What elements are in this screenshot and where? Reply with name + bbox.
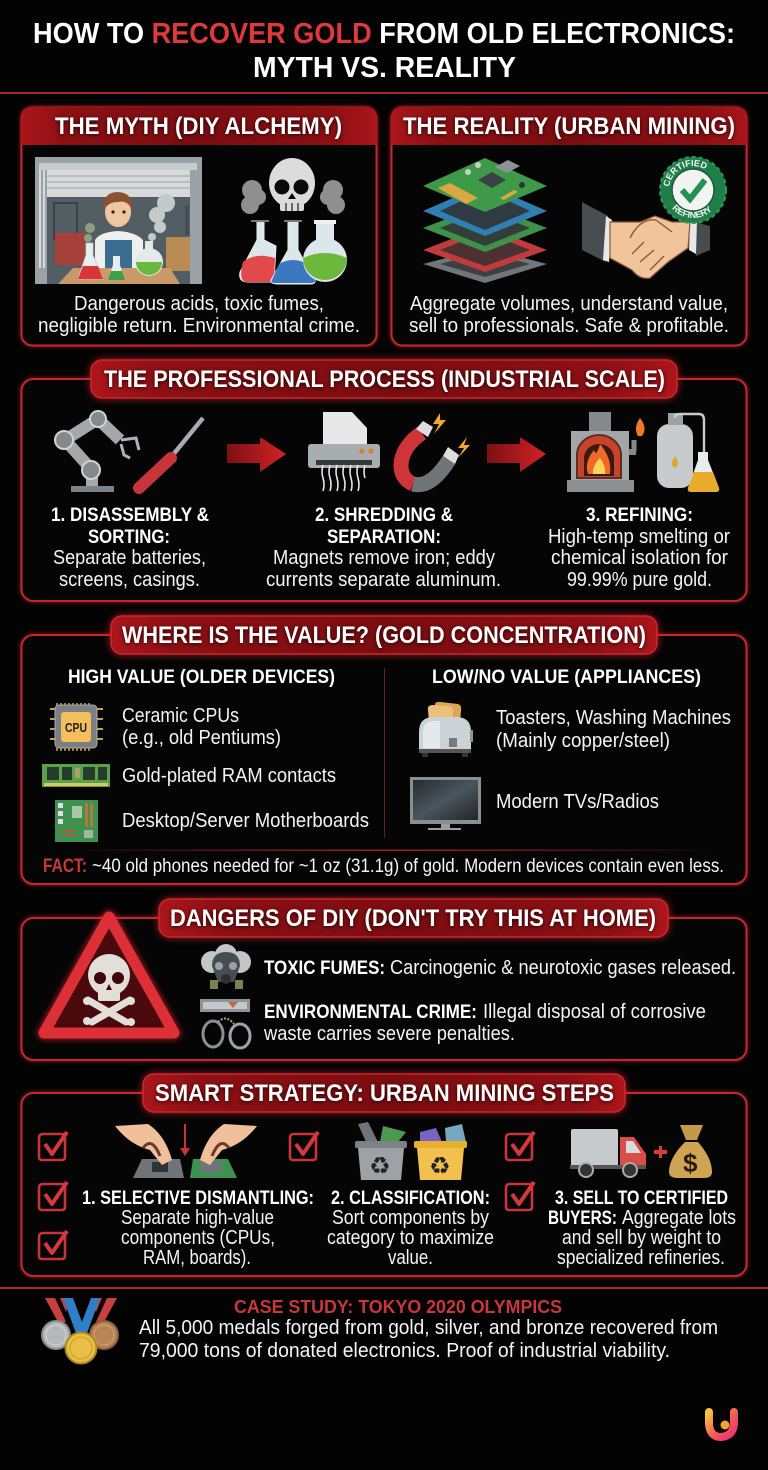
text: myth description: Dangerous acids, toxic fumes, (74, 293, 324, 315)
text: environmental crime (263, 1001, 706, 1045)
icon: truck (570, 1129, 646, 1177)
heading: professional process: THE PROFESSIONAL PROCESS (INDUSTRIAL SCALE) (104, 366, 665, 393)
text: case study body: All 5,000 medals forged from gold, silver, and bronze recovered from (139, 1317, 718, 1339)
heading: smart strategy (143, 1074, 625, 1112)
text: step 1: 1. DISASSEMBLY & (51, 504, 209, 526)
text: sell to certified buyers (548, 1187, 736, 1269)
icon: motherboard (55, 800, 98, 842)
icon: robot arm (55, 411, 139, 492)
heading: dangers of DIY: DANGERS OF DIY (DON'T TRY THIS AT HOME) (170, 905, 656, 932)
text: classification: value. (388, 1247, 433, 1269)
icon: recycling bins: ♻ (429, 1152, 451, 1180)
checklist icons: right column (506, 1132, 534, 1210)
step 2: shredding and separation (266, 412, 501, 591)
icon: leaking pipe and handcuffs (200, 999, 250, 1048)
title: HOW TO RECOVER GOLD FROM OLD ELECTRONICS: (33, 18, 735, 50)
icon: plus sign (654, 1146, 667, 1158)
text: step 3: 3. REFINING: (586, 504, 693, 526)
text: toxic fumes (264, 957, 736, 979)
icon: television (410, 777, 481, 830)
text: toxic fumes: Carcinogenic & neurotoxic gases released. (390, 957, 736, 979)
text: sell to certified buyers: and sell by weight to (562, 1227, 721, 1249)
panel: dangers of DIY (22, 899, 746, 1060)
icon: money bag (669, 1125, 712, 1178)
text: myth description (38, 293, 360, 337)
text: step 3: 99.99% pure gold. (567, 569, 712, 591)
text: classification: category to maximize (327, 1227, 494, 1249)
text: case study heading: CASE STUDY: TOKYO 2020 OLYMPICS (234, 1296, 562, 1317)
column: high value: HIGH VALUE (OLDER DEVICES) (68, 666, 335, 688)
text: step 1: screens, casings. (59, 569, 200, 591)
text: step 1 (51, 504, 209, 591)
text: step 2 (266, 504, 501, 591)
panel: the professional process (22, 360, 746, 601)
text: step 1: SORTING: (88, 526, 170, 548)
step 1: disassembly and sorting (51, 411, 209, 591)
heading: the reality: THE REALITY (URBAN MINING) (403, 113, 735, 140)
panel: where is the value (22, 616, 746, 884)
text: step 1: Separate batteries, (53, 547, 206, 569)
icon: screwdriver (139, 418, 203, 488)
text: RAM contacts: Gold-plated RAM contacts (122, 765, 336, 787)
column: low value: LOW/NO VALUE (APPLIANCES) (432, 666, 701, 688)
icon: handshake (582, 202, 710, 278)
icon: recycling bins: ♻ (369, 1152, 391, 1180)
text: selective dismantling: 1. SELECTIVE DISMANTLING: (82, 1187, 314, 1209)
column: high value (42, 666, 369, 842)
text: classification: Sort components by (332, 1207, 489, 1229)
text: sell to certified buyers: 3. SELL TO CERTIFIED (555, 1187, 728, 1209)
text: classification: 2. CLASSIFICATION: (331, 1187, 490, 1209)
text: toasters: (Mainly copper/steel) (496, 730, 670, 752)
text: selective dismantling: Separate high-value (121, 1207, 274, 1229)
column: low value (410, 666, 731, 830)
text: myth description: negligible return. Environmental crime. (38, 315, 360, 337)
icon: garage chemist (35, 157, 202, 284)
icon: shredder (308, 412, 380, 491)
step: sell to certified buyers (548, 1125, 736, 1269)
heading: dangers of DIY (159, 899, 668, 937)
text: selective dismantling (82, 1187, 314, 1269)
icon: certified refinery badge: REFINERY (672, 204, 710, 218)
text: modern TVs: Modern TVs/Radios (496, 791, 659, 813)
text: step 3 (548, 504, 730, 591)
text: case study body (139, 1317, 718, 1362)
text: sell to certified buyers: specialized refineries. (557, 1247, 725, 1269)
heading: smart strategy: SMART STRATEGY: URBAN MINING STEPS (155, 1080, 614, 1107)
text: reality description: Aggregate volumes, understand value, (410, 293, 728, 315)
icon: gas mask in cloud (201, 944, 251, 989)
text: classification (327, 1187, 494, 1269)
icon: magnet (401, 413, 470, 485)
text: step 3: High-temp smelting or (548, 526, 730, 548)
heading: professional process (91, 360, 677, 398)
heading: where is the value (111, 616, 657, 654)
icon: CPU (50, 703, 103, 751)
text: step 2: Magnets remove iron; eddy (273, 547, 495, 569)
text: ceramic CPUs: Ceramic CPUs (122, 705, 239, 727)
icon: money bag: $ (683, 1148, 698, 1178)
text: reality description (409, 293, 729, 337)
icon: certified refinery badge: CERTIFIED (664, 160, 707, 186)
title (33, 18, 735, 84)
icon: furnace (567, 412, 645, 492)
text: ceramic CPUs (122, 705, 281, 749)
panel: smart strategy (22, 1074, 746, 1276)
panel: the reality (387, 103, 751, 350)
icon: warning triangle with skull (44, 917, 174, 1033)
text: case study body: 79,000 tons of donated electronics. Proof of industrial viability. (139, 1340, 670, 1362)
text: environmental crime: Illegal disposal of corrosive (483, 1001, 706, 1023)
step 3: refining (548, 412, 730, 591)
text: sell to certified buyers: Aggregate lots (622, 1207, 736, 1229)
fact line: FACT: (43, 855, 87, 877)
title: MYTH VS. REALITY (253, 52, 516, 84)
case study: Tokyo 2020 (42, 1296, 718, 1364)
text: toasters: Toasters, Washing Machines (496, 707, 731, 729)
text: ceramic CPUs: (e.g., old Pentiums) (122, 727, 281, 749)
step: classification (327, 1122, 494, 1269)
text: environmental crime: waste carries severe penalties. (263, 1023, 515, 1045)
icon: certified refinery badge (659, 156, 727, 224)
text: toxic fumes: TOXIC FUMES: (264, 957, 385, 979)
heading: where is the value: WHERE IS THE VALUE? (GOLD CONCENTRATION) (122, 622, 646, 649)
text: selective dismantling: components (CPUs, (121, 1227, 275, 1249)
text: step 2: currents separate aluminum. (266, 569, 501, 591)
checklist icons: left column (39, 1132, 67, 1259)
heading: the myth: THE MYTH (DIY ALCHEMY) (55, 113, 342, 140)
icon: chemical tank and flask (657, 413, 719, 492)
text: step 2: SEPARATION: (327, 526, 441, 548)
text: step 3: chemical isolation for (551, 547, 728, 569)
icon: medals (42, 1298, 118, 1364)
icon: toaster (419, 702, 473, 757)
icon: hands dismantling boards (115, 1124, 257, 1178)
icon: recycling bins (355, 1122, 467, 1180)
heading: the reality (391, 107, 747, 145)
arrow: step 2 to 3 (487, 437, 546, 472)
heading: the myth (21, 107, 377, 145)
text: motherboards: Desktop/Server Motherboards (122, 810, 369, 832)
icon: RAM stick (42, 764, 110, 787)
text: selective dismantling: RAM, boards). (143, 1247, 251, 1269)
arrow: step 1 to 2 (227, 437, 286, 472)
text: step 2: 2. SHREDDING & (315, 504, 453, 526)
step: selective dismantling (82, 1124, 314, 1269)
panel: the myth (21, 107, 377, 346)
checklist icon: middle (290, 1132, 318, 1160)
icon: stacked circuit boards (423, 158, 547, 283)
text: environmental crime: ENVIRONMENTAL CRIME: (264, 1001, 477, 1023)
icon: skull over flasks (240, 158, 347, 284)
text: sell to certified buyers: BUYERS: (548, 1207, 617, 1229)
icon: CPU: CPU (65, 720, 87, 735)
text: toasters (496, 707, 731, 752)
logo (709, 1412, 734, 1437)
text: reality description: sell to professionals. Safe & profitable. (409, 315, 729, 337)
